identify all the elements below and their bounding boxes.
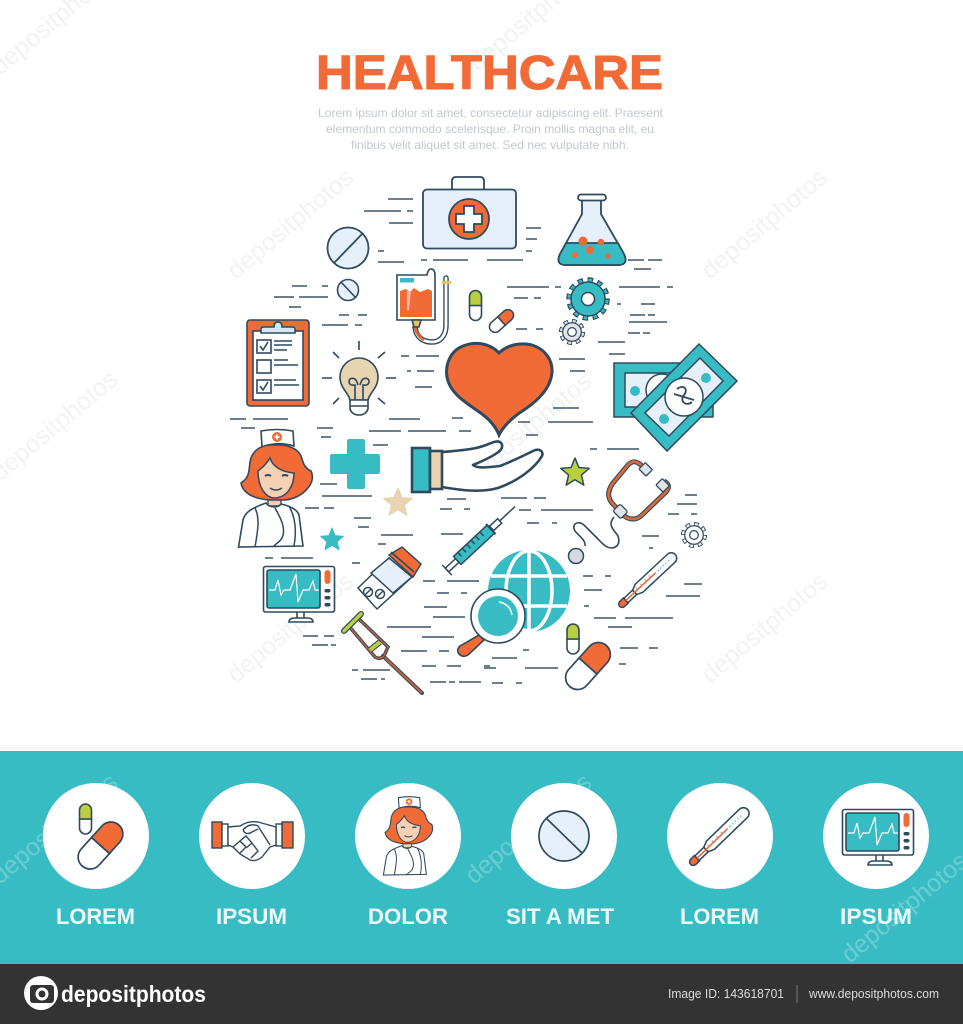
item: lorem thermometer: LOREM (680, 904, 759, 929)
item: ipsum monitor: IPSUM (840, 904, 912, 929)
watermarks: depositphotos (222, 567, 359, 689)
item: ipsum monitor (823, 783, 929, 929)
decorative dashes (230, 199, 702, 683)
item: lorem thermometer (667, 783, 773, 929)
title: HEALTHCARE (316, 47, 663, 100)
icon: flask (558, 194, 626, 265)
panel: teal feature band (0, 751, 963, 969)
icon: light bulb (322, 341, 396, 415)
icon: small orange pill (487, 307, 516, 335)
icon: clipboard (247, 320, 309, 406)
icon: tan star (384, 488, 412, 515)
icon: white gear (684, 525, 704, 545)
icon: IV drip bag (397, 269, 451, 342)
icon: nurse (238, 430, 312, 547)
intro text: finibus velit aliquet sit amet. Sed nec vulputate nibh. (351, 138, 629, 152)
watermarks: depositphotos (696, 567, 833, 689)
watermarks (0, 0, 833, 689)
icon: money bills (614, 344, 737, 451)
icon: small lime pill (470, 290, 482, 320)
intro text: elementum commodo scelerisque. Proin mollis magna elit, eu (326, 122, 654, 136)
item: ipsum handshake: IPSUM (216, 904, 287, 929)
item: dolor nurse: DOLOR (368, 904, 448, 929)
icon: grey gear (562, 322, 582, 342)
icon: crutch (344, 614, 422, 693)
icon: syringe (442, 501, 520, 575)
icon: globe (488, 549, 570, 633)
item: lorem pills (43, 783, 149, 929)
item: dolor nurse (355, 783, 461, 929)
icon: large tablet (328, 228, 368, 268)
panel: footer bar (0, 964, 963, 1024)
watermarks: depositphotos (460, 367, 597, 489)
icon: open hand with cuff (412, 441, 542, 492)
item: lorem pills: LOREM (56, 904, 135, 929)
icon: teal gear (570, 281, 606, 317)
icon: monitor (264, 566, 334, 622)
icon: pill bottle (358, 547, 421, 609)
icon: first aid kit (423, 177, 516, 248)
icon: magnifying glass (458, 589, 525, 656)
item: sit a met tablet: SIT A MET (506, 904, 615, 929)
icon: big capsule (561, 638, 615, 694)
logo (24, 976, 206, 1010)
icon: stethoscope (568, 462, 669, 564)
logo: depositphotos (61, 981, 206, 1007)
icon: heart (447, 343, 552, 435)
icon: thermometer (616, 550, 679, 610)
intro text (318, 106, 664, 152)
intro text: Lorem ipsum dolor sit amet, consectetur adipiscing elit. Praesent (318, 106, 664, 120)
watermarks: depositphotos (696, 163, 833, 285)
icon: small tablet (338, 280, 358, 300)
icon: teal star (321, 528, 343, 550)
website: www.depositphotos.com (808, 987, 939, 1001)
icon: medical cross (330, 439, 380, 489)
band watermarks: depositphotos (460, 768, 597, 890)
icon: lime star (561, 458, 589, 485)
image id: Image ID: 143618701 (668, 987, 784, 1001)
item: sit a met tablet (506, 783, 617, 929)
item: ipsum handshake (199, 783, 305, 929)
watermarks: depositphotos (222, 163, 359, 285)
band watermarks (0, 768, 963, 969)
icon: lime capsule (567, 624, 579, 654)
